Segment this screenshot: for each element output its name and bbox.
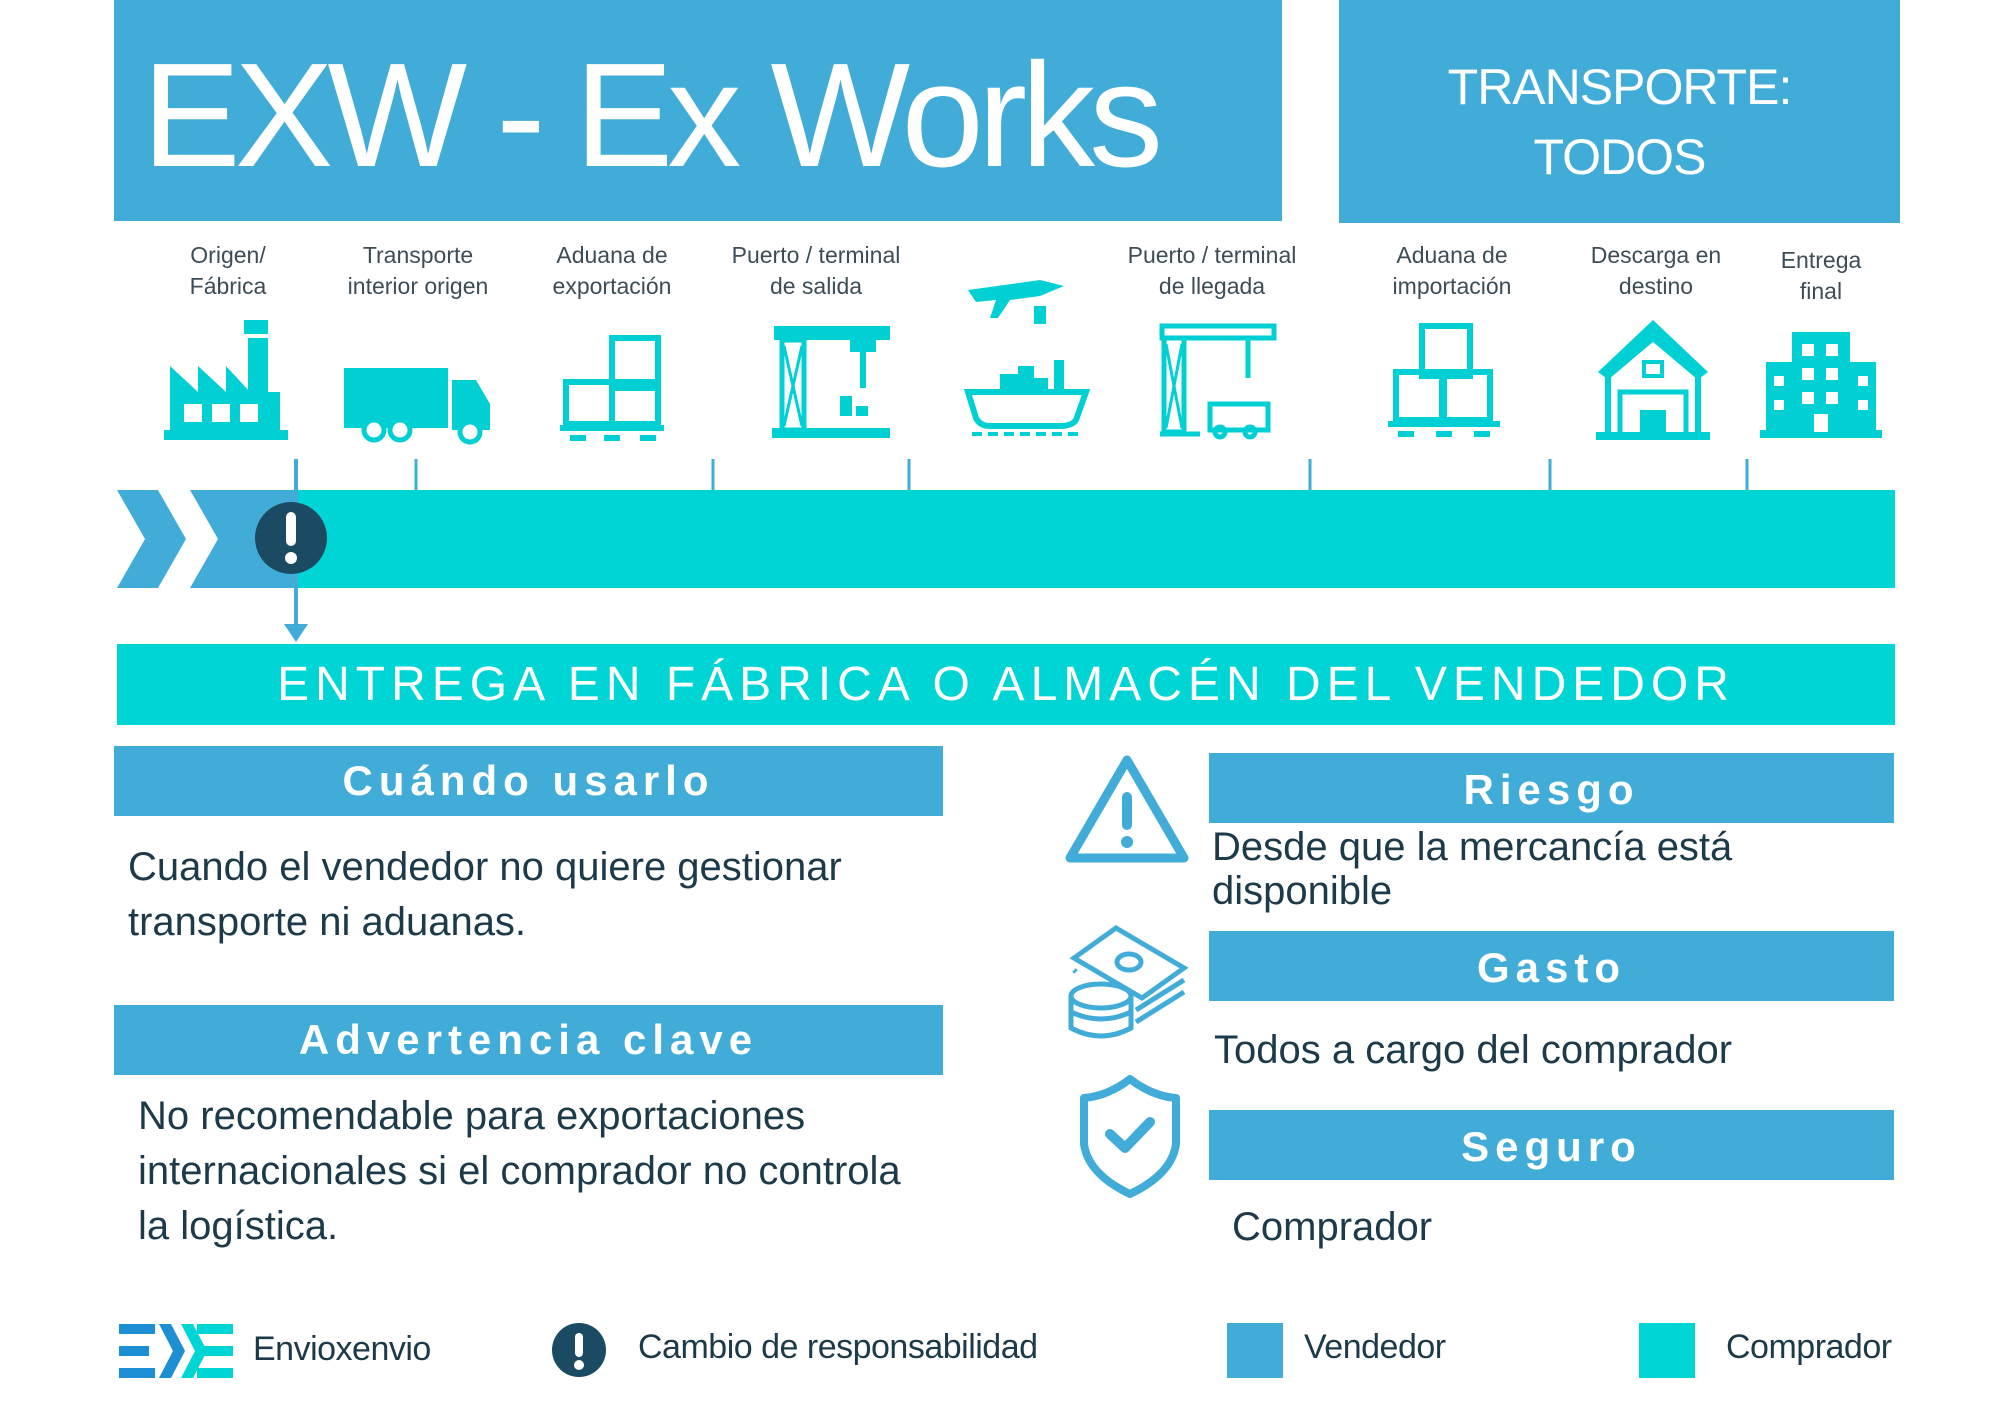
step labels: Aduana de (556, 242, 668, 268)
footer legend: Comprador (1726, 1328, 1892, 1366)
footer legend: Vendedor (1304, 1328, 1446, 1366)
icon: crane arrival (1160, 326, 1274, 437)
legend: vendedor (1227, 1323, 1283, 1378)
icon: crane exit (772, 326, 890, 438)
panel: gasto: Todos a cargo del comprador (1214, 1028, 1732, 1072)
icon: factory (164, 320, 288, 440)
panel: seguro: Seguro (1461, 1123, 1642, 1170)
banner (117, 644, 1895, 725)
panel: gasto (1209, 931, 1894, 1072)
legend: comprador (1639, 1323, 1695, 1378)
panel: gasto: Gasto (1477, 944, 1626, 991)
step labels (190, 242, 1862, 304)
panel: advertencia clave: No recomendable para exportaciones (138, 1094, 805, 1138)
step labels: exportación (553, 273, 671, 299)
banner: ENTREGA EN FÁBRICA O ALMACÉN DEL VENDEDOR (277, 658, 1735, 711)
icon: boxes export (560, 338, 664, 438)
step labels: Entrega (1781, 247, 1861, 273)
panel: cuándo usarlo: Cuando el vendedor no quiere gestionar (128, 845, 842, 889)
transport box: TODOS (1534, 129, 1705, 185)
step labels: de salida (770, 273, 862, 299)
step labels: Puerto / terminal (1128, 242, 1296, 268)
icon: shield (1080, 1074, 1180, 1198)
icon: responsibility change (255, 502, 327, 574)
panel: seguro: Comprador (1232, 1205, 1432, 1249)
legend: responsibility change (552, 1323, 606, 1377)
panel: advertencia clave (114, 1005, 943, 1248)
timeline bar (117, 459, 1895, 642)
panel: advertencia clave: Advertencia clave (299, 1016, 758, 1063)
panel: seguro (1209, 1110, 1894, 1249)
icon: boxes import (1388, 326, 1500, 434)
panel: riesgo: Riesgo (1463, 766, 1640, 813)
panel: advertencia clave: la logística. (138, 1204, 338, 1248)
footer legend: Envioxenvio (253, 1330, 431, 1368)
panel: cuándo usarlo: Cuándo usarlo (342, 757, 715, 804)
panel: riesgo: Desde que la mercancía está (1212, 825, 1732, 869)
icon: plane and ship (968, 280, 1086, 434)
panel: cuándo usarlo: transporte ni aduanas. (128, 900, 526, 944)
panel: cuándo usarlo (114, 746, 943, 944)
step labels: de llegada (1159, 273, 1265, 299)
transport box: TRANSPORTE: (1448, 59, 1791, 115)
step labels: Aduana de (1396, 242, 1508, 268)
title (114, 0, 1282, 221)
logo (119, 1324, 233, 1378)
step labels: Descarga en (1591, 242, 1721, 268)
footer legend: Cambio de responsabilidad (638, 1328, 1038, 1366)
step labels: Transporte (363, 242, 473, 268)
panel: riesgo (1209, 753, 1894, 913)
icon: warehouse (1596, 320, 1710, 440)
step labels: interior origen (348, 273, 488, 299)
icon: building (1760, 332, 1882, 438)
step labels: destino (1619, 273, 1693, 299)
step labels: Puerto / terminal (732, 242, 900, 268)
step labels: final (1800, 278, 1842, 304)
icons row (164, 280, 1882, 444)
panel: advertencia clave: internacionales si el comprador no controla (138, 1149, 901, 1193)
footer legend (119, 1323, 1892, 1378)
title: EXW - Ex Works (142, 33, 1157, 198)
step labels: Origen/ (190, 242, 266, 268)
icon: warning (1066, 756, 1188, 862)
panel: riesgo: disponible (1212, 869, 1392, 913)
icon: truck (344, 368, 490, 442)
icon: money (1068, 925, 1188, 1038)
transport box (1339, 0, 1900, 223)
step labels: Fábrica (190, 273, 266, 299)
step labels: importación (1393, 273, 1511, 299)
